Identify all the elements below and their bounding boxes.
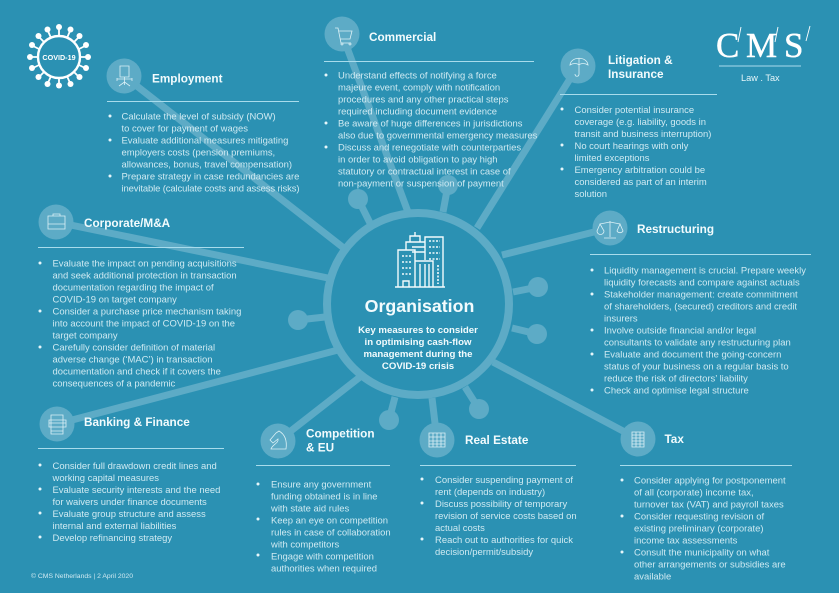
panel: Banking & Finance: working capital measures [52,473,159,484]
panel: Competition & EU: funding obtained is in line [271,492,378,502]
panel: Commercial: Be aware of huge differences in jurisdictions [338,118,523,129]
panel: Banking & Finance: for waivers under finance documents [52,497,207,508]
panel: Restructuring: Involve outside financial and/or legal [604,326,756,336]
panel: Tax: existing preliminary (corporate) [634,524,764,534]
icon: shopping cart [324,16,360,52]
panel: Real Estate: Consider suspending payment of [435,475,573,486]
panel: Real Estate: Real Estate [465,434,529,447]
logo: CMS Law.Tax: C [716,26,739,65]
panel: Banking & Finance: Develop refinancing strategy [52,533,172,544]
panel: Competition & EU: with competitors [270,540,339,550]
heading: Organisation: Organisation [365,296,474,316]
panel: Competition & EU: rules in case of collaboration [271,528,391,538]
panel: Corporate/M&A [38,204,244,389]
panel: Real Estate: Discuss possibility of temporary [435,499,567,510]
panel: Employment: Employment [152,72,223,86]
panel: Employment: allowances, bonus, travel compensation) [122,159,292,170]
panel: Tax: other arrangements or subsidies are [634,560,786,570]
panel: Competition & EU: authorities when required [271,564,377,574]
panel: Competition & EU: with state aid rules [270,504,349,514]
panel: Tax: Tax [664,433,684,446]
panel: Restructuring: of shareholders, (secured) creditors and credit [604,302,797,312]
icon: apartment building [420,422,454,458]
panel: Corporate/M&A: COVID-19 on target company [52,294,177,305]
panel: Tax [620,422,792,582]
icon: COVID-19 virus badge [27,24,91,88]
panel: Employment [106,58,300,194]
panel: Commercial: required including document evidence [338,106,497,117]
panel: Corporate/M&A: Evaluate the impact on pending acquisitions [52,258,237,269]
panel: Corporate/M&A: consequences of a pandemic [52,378,176,389]
panel: Litigation & Insurance: transit and business interruption) [574,129,711,140]
panel: Commercial: procedures and any other practical steps [338,94,509,105]
panel: Competition & EU: Engage with competition [271,552,374,562]
logo: CMS Law.Tax: Law . Tax [741,73,780,83]
panel: Litigation & Insurance: solution [574,189,607,200]
logo: CMS Law.Tax: M [746,26,777,65]
panel: Commercial: Understand effects of notifying a force [338,70,497,81]
panel: Restructuring: liquidity forecasts and compare against actuals [604,278,800,288]
panel: Competition & EU: Competition [306,428,375,440]
panel: Corporate/M&A: Consider a purchase price mechanism taking [52,306,241,317]
panel: Litigation & Insurance: considered as part of an interim [574,177,707,188]
panel: Real Estate [420,422,577,558]
panel: Restructuring: insurers [604,314,638,324]
panel: Restructuring: Restructuring [637,223,714,236]
panel: Tax: of all (corporate) income tax, [634,488,754,498]
text: footer: © CMS Netherlands | 2 April 2020 [31,572,133,580]
panel: Litigation & Insurance: Consider potential insurance [574,105,694,116]
panel: Restructuring: status of your business on a regular basis to [604,362,789,372]
panel: Employment: to cover for payment of wages [122,123,248,134]
panel: Restructuring: Stakeholder management: create commitment [604,290,798,300]
panel: Tax: income tax assessments [634,536,738,546]
panel: Real Estate: revision of service costs based on [435,511,577,522]
panel: Banking & Finance: Evaluate security interests and the need [52,485,220,496]
panel: Commercial [324,16,538,189]
panel: Tax: Consider applying for postponement [634,476,786,486]
text: centre subtitle: management during the [363,349,473,360]
panel: Litigation & Insurance: No court hearings with only [574,141,689,152]
panel: Commercial: majeure event, comply with notification [338,82,500,93]
panel: Commercial: Commercial [369,31,436,44]
panel: Tax: turnover tax (VAT) and payroll taxes [634,500,784,510]
panel: Tax: Consult the municipality on what [634,548,770,558]
panel: Employment: Evaluate additional measures mitigating [122,135,288,146]
panel: Restructuring: Liquidity management is crucial. Prepare weekly [604,266,806,276]
panel: Banking & Finance: Evaluate group structure and assess [52,509,206,520]
hub: central ring with spokes [56,34,638,441]
panel: Corporate/M&A: documentation and check if it covers the [52,366,221,377]
panel: Restructuring [590,210,811,396]
logo: CMS Law.Tax: S [784,26,803,65]
panel: Corporate/M&A: Carefully consider definition of material [52,342,215,353]
text: centre subtitle: in optimising cash-flow [365,337,472,348]
panel: Real Estate: decision/permit/subsidy [435,547,533,558]
panel: Commercial: statutory or contractual interest in case of [338,166,511,177]
icon: office chair [106,58,142,94]
panel: Real Estate: actual costs [435,523,485,534]
panel: Commercial: non-payment or suspension of payment [338,178,504,189]
panel: Banking & Finance: internal and external liabilities [52,521,177,532]
panel: Litigation & Insurance: limited exceptions [574,153,650,164]
panel: Litigation & Insurance: coverage (e.g. liability, goods in [574,117,706,128]
panel: Tax: available [634,572,671,582]
panel: Restructuring: Evaluate and document the going-concern [604,350,781,360]
panel: Restructuring: reduce the risk of directors’ liability [604,374,748,384]
panel: Competition & EU: Ensure any government [271,480,372,490]
panel: Tax: Consider requesting revision of [634,512,764,522]
panel: Litigation & Insurance: Litigation & [608,54,673,67]
icon: scales [592,210,628,246]
icon: chess knight [260,424,296,458]
panel: Restructuring: Check and optimise legal structure [604,386,749,396]
panel: Real Estate: rent (depends on industry) [435,487,545,498]
icon: umbrella [560,48,596,84]
panel: Litigation & Insurance [560,48,717,200]
panel: Employment: Calculate the level of subsidy (NOW) [122,111,276,122]
panel: Competition & EU: Keep an eye on competition [271,516,388,526]
panel: Commercial: in order to avoid obligation to pay high [338,154,498,165]
icon: city buildings [395,232,445,287]
panel: Corporate/M&A: into account the impact of COVID-19 on the [52,318,235,329]
panel: Real Estate: Reach out to authorities for quick [435,535,573,546]
panel: Competition & EU [256,424,391,574]
panel: Employment: inevitable (calculate costs and assess risks) [122,183,300,194]
icon: card and device [40,406,74,442]
panel: Banking & Finance: Consider full drawdown credit lines and [52,461,217,472]
panel: Restructuring: consultants to validate any restructuring plan [604,338,791,348]
icon: tax form [620,422,656,456]
panel: Corporate/M&A: target company [52,330,118,341]
panel: Employment: employers costs (pension premiums, [122,147,275,158]
icon: COVID-19 virus badge: COVID-19 [42,53,76,62]
text: centre subtitle: Key measures to consider [358,325,478,336]
panel: Litigation & Insurance: Insurance [608,68,664,81]
panel: Corporate/M&A: adverse change (‘MAC’) in transaction [52,354,212,365]
text: centre subtitle: COVID-19 crisis [382,361,454,372]
panel: Corporate/M&A: Corporate/M&A [84,217,171,230]
panel: Banking & Finance: Banking & Finance [84,416,190,429]
panel: Employment: Prepare strategy in case redundancies are [122,171,299,182]
panel: Litigation & Insurance: Emergency arbitration could be [574,165,705,176]
panel: Commercial: Discuss and renegotiate with counterparties [338,142,521,153]
panel: Corporate/M&A: documentation regarding the impact of [52,282,214,293]
panel: Corporate/M&A: and seek additional protection in transaction [52,270,237,281]
panel: Competition & EU: & EU [306,442,334,454]
panel: Commercial: also due to governmental emergency measures [338,130,538,141]
panel: Banking & Finance [38,406,224,544]
icon: briefcase [38,204,74,240]
logo: CMS Law.Tax [716,26,810,83]
